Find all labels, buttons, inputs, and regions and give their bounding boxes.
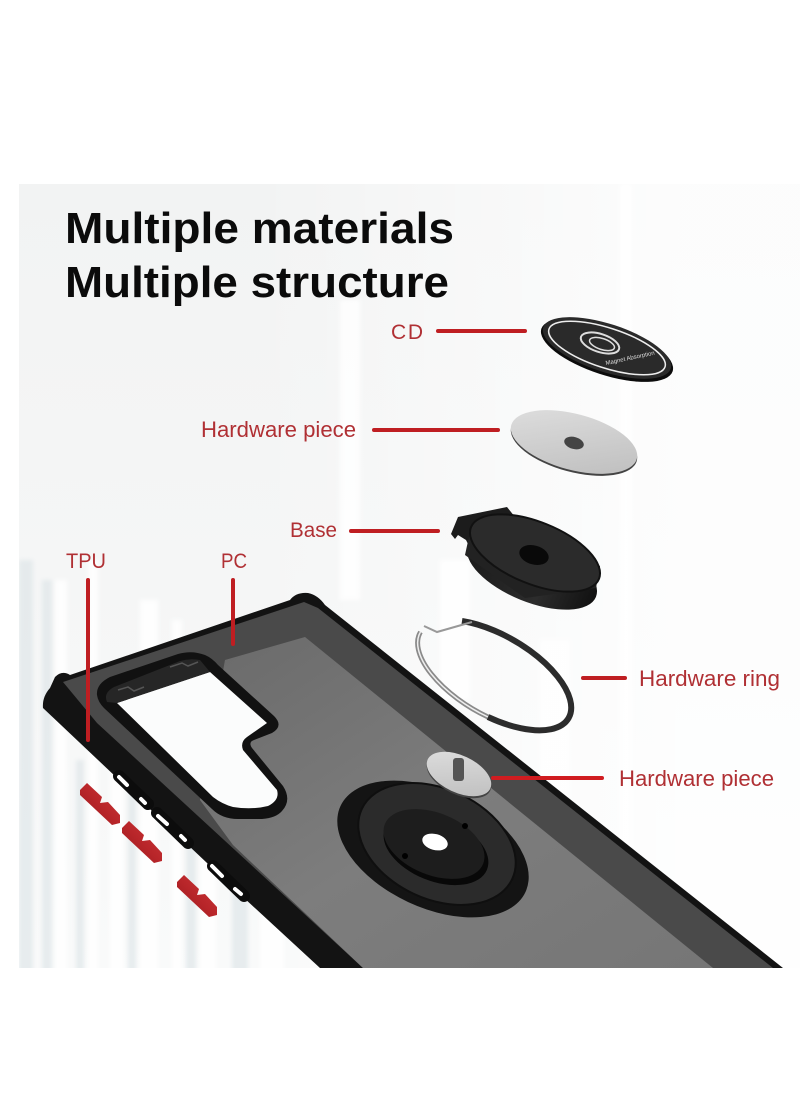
phone case <box>43 593 783 968</box>
label: Hardware ring <box>581 666 780 691</box>
label: Hardware piece (upper): Hardware piece <box>201 417 356 442</box>
label: CD <box>391 321 527 344</box>
part: hardware disc <box>504 398 644 488</box>
part: hardware ring <box>418 621 571 730</box>
part: hardware piece with post <box>420 743 498 807</box>
dark translucent back band <box>63 602 773 968</box>
label: Base: Base <box>290 519 337 542</box>
label: PC <box>221 550 247 646</box>
part: CD sticker <box>534 304 680 395</box>
red side buttons <box>80 783 217 917</box>
title <box>65 204 454 307</box>
title: Multiple structure <box>65 258 449 307</box>
label: Hardware piece (lower) <box>491 766 774 791</box>
label: TPU: TPU <box>66 550 106 573</box>
label: Base <box>290 519 440 542</box>
part: base <box>451 498 611 626</box>
background panel <box>19 184 458 968</box>
button 2 <box>122 821 162 863</box>
side button holes <box>119 776 244 896</box>
label: TPU <box>66 550 106 742</box>
camera cutout <box>97 652 287 819</box>
label: Hardware piece (lower): Hardware piece <box>619 766 774 791</box>
button 1 <box>80 783 120 825</box>
part: CD sticker: Magnet Absorption <box>605 351 655 367</box>
button 3 <box>177 875 217 917</box>
title: Multiple materials <box>65 204 454 253</box>
label: PC: PC <box>221 550 247 573</box>
case outer black frame <box>43 593 783 968</box>
label: Hardware piece (upper) <box>201 417 500 442</box>
ring mount on the case <box>316 753 550 945</box>
lighter translucent back <box>200 637 713 968</box>
label: Hardware ring: Hardware ring <box>639 666 780 691</box>
label: CD: CD <box>391 321 423 344</box>
